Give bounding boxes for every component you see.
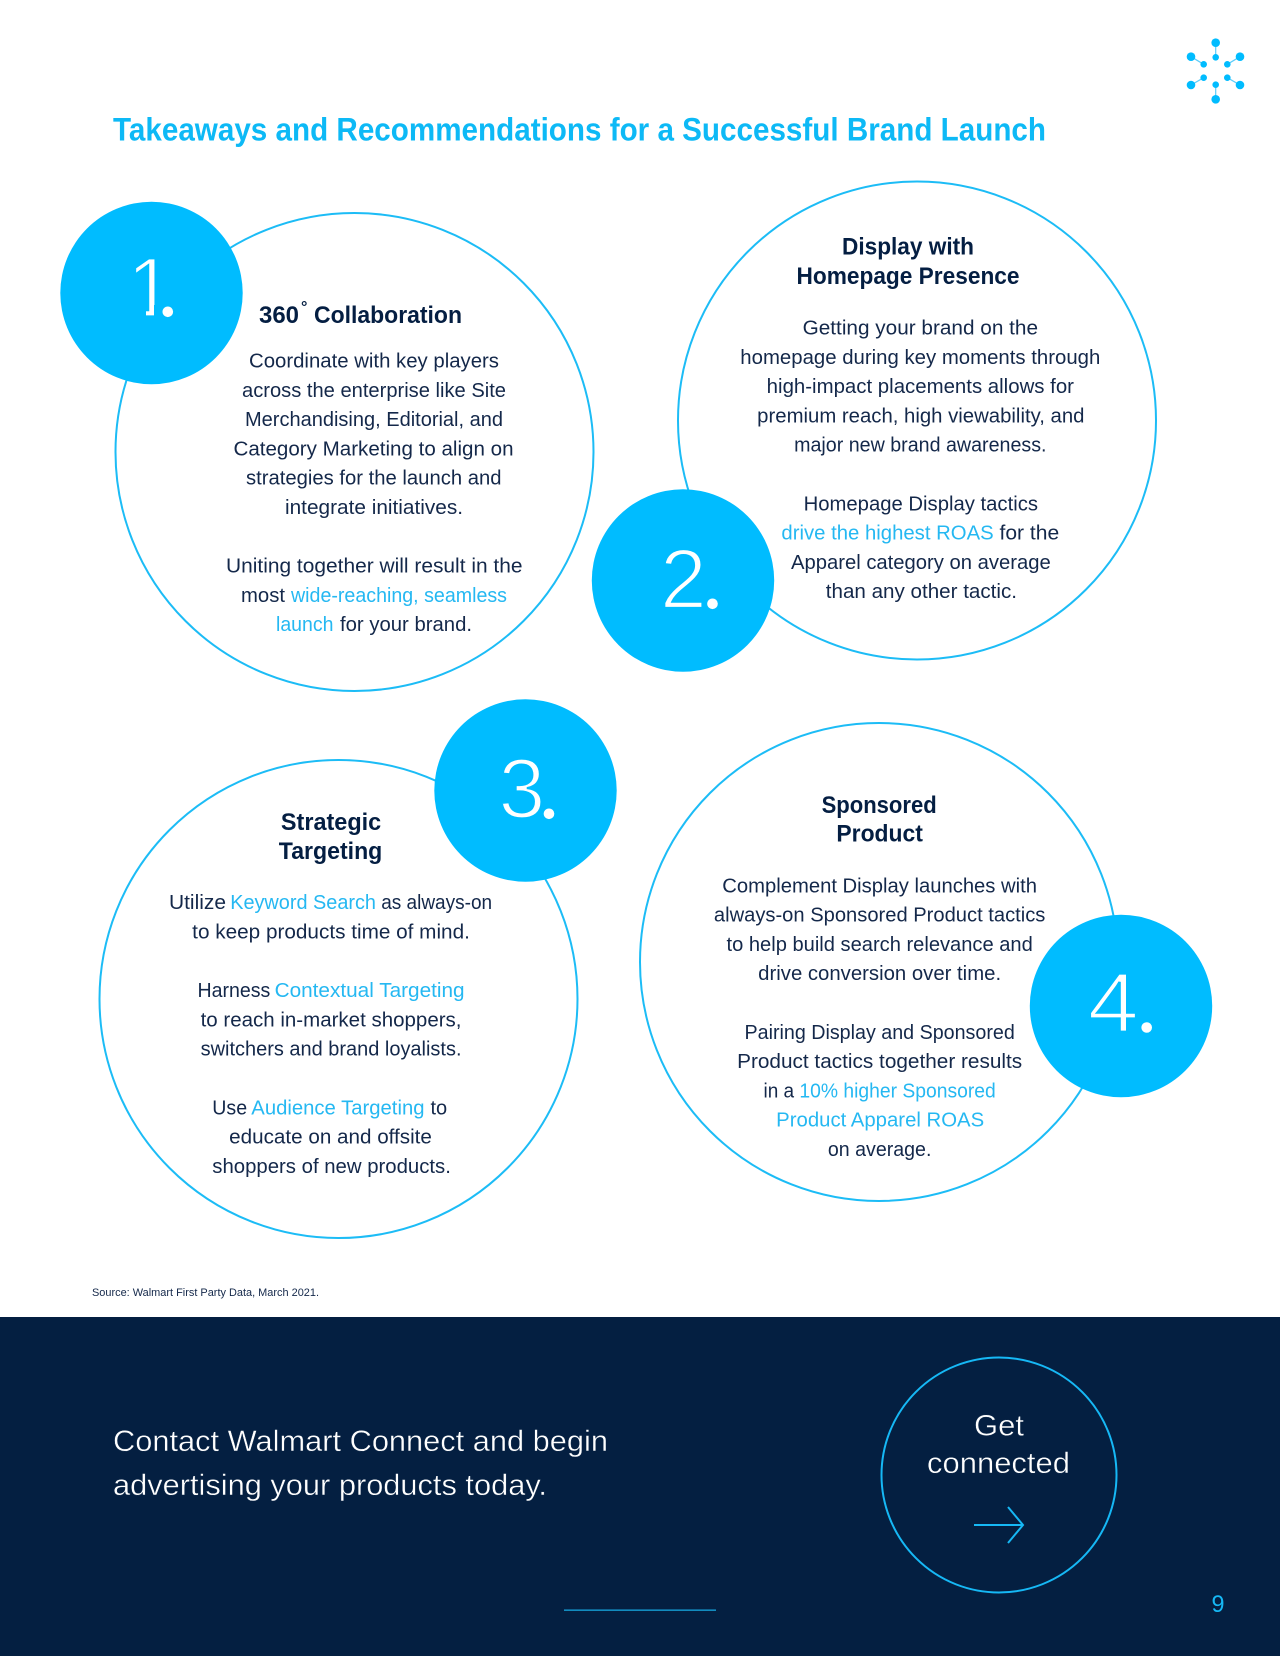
footer message: advertising your products today.: [113, 1469, 547, 1502]
circle outline 4: [640, 723, 1118, 1201]
heading: sponsored product: Product: [836, 821, 923, 848]
body text 1: Merchandising, Editorial, and: [245, 409, 503, 431]
body text 3: Utilize: [169, 892, 226, 914]
heading: 360 collaboration: 360: [259, 302, 299, 329]
body text 3: Keyword Search: [230, 892, 376, 914]
body text 1: Coordinate with key players: [249, 350, 499, 372]
title: Takeaways and Recommendations for a Successful Brand Launch: [113, 112, 1046, 148]
body text 2: drive the highest ROAS: [781, 523, 994, 545]
body text 1: strategies for the launch and: [246, 468, 502, 490]
body text 2: premium reach, high viewability, and: [757, 405, 1084, 427]
panel: 360 collaboration: [60, 202, 594, 691]
body text 4: always-on Sponsored Product tactics: [714, 905, 1045, 927]
page number: 9: [1212, 1591, 1224, 1618]
footer divider: [564, 1610, 716, 1611]
number badge 1: .: [160, 261, 176, 328]
body text 2: major new brand awareness.: [794, 435, 1046, 457]
number badge 3: [434, 699, 617, 882]
body text 1: for your brand.: [340, 614, 472, 636]
number badge 1: [60, 202, 243, 384]
body text 4: Product Apparel ROAS: [776, 1110, 984, 1132]
body text 1: Uniting together will result in the: [226, 556, 522, 578]
body text 2: homepage during key moments through: [740, 347, 1100, 369]
number badge 4: .: [1138, 977, 1155, 1044]
number badge 4: 4: [1088, 956, 1139, 1050]
number badge 2: [592, 489, 774, 672]
icon: arrow: [974, 1507, 1023, 1543]
number badge 2: .: [704, 553, 721, 620]
body text 1: across the enterprise like Site: [242, 380, 506, 402]
body text 1: wide-reaching, seamless: [290, 585, 507, 607]
body text 3: [169, 892, 492, 1178]
footer band: [0, 1317, 1280, 1656]
body text 2: for the: [1000, 523, 1059, 545]
number badge 2: 2: [660, 532, 707, 626]
body text 4: on average.: [828, 1139, 931, 1161]
footer message: Contact Walmart Connect and begin: [113, 1425, 608, 1458]
number badge 3: .: [541, 763, 557, 830]
body text 1: integrate initiatives.: [285, 497, 463, 519]
body text 2: [740, 318, 1100, 603]
body text 2: Homepage Display tactics: [804, 493, 1038, 515]
body text 3: to reach in-market shoppers,: [201, 1009, 462, 1031]
body text 3: educate on and offsite: [229, 1127, 432, 1149]
body text 1: most: [241, 585, 285, 607]
body text 4: 10% higher Sponsored: [799, 1080, 996, 1102]
heading: 360 collaboration: °: [301, 299, 307, 316]
body text 3: Use: [212, 1097, 247, 1119]
body text 3: Harness: [198, 980, 270, 1002]
icon: spark logo: [1187, 38, 1244, 104]
source note: Source: Walmart First Party Data, March 2021.: [92, 1287, 319, 1299]
body text 3: Audience Targeting: [251, 1097, 424, 1119]
number badge 4: [1030, 915, 1212, 1097]
circle outline 2: [678, 182, 1156, 660]
body text 2: high-impact placements allows for: [767, 376, 1074, 398]
heading: 360 collaboration: Collaboration: [314, 302, 462, 329]
heading: display with homepage presence: [796, 234, 1020, 290]
body text 3: as always-on: [381, 892, 492, 914]
circle outline 3: [100, 760, 578, 1238]
body text 4: Pairing Display and Sponsored: [744, 1022, 1015, 1044]
panel: strategic targeting: [100, 699, 617, 1238]
heading: strategic targeting: Targeting: [279, 838, 382, 865]
body text 3: shoppers of new products.: [212, 1156, 451, 1178]
body text 3: to: [430, 1097, 447, 1119]
circle outline 1: [116, 213, 594, 691]
body text 2: than any other tactic.: [826, 581, 1017, 603]
heading: strategic targeting: Strategic: [281, 809, 381, 836]
get connected button: Get: [974, 1410, 1025, 1442]
get connected button: connected: [927, 1447, 1070, 1480]
body text 4: [714, 875, 1045, 1161]
footer message: [113, 1425, 608, 1502]
body text 4: drive conversion over time.: [758, 963, 1001, 985]
body text 1: Category Marketing to align on: [234, 438, 514, 460]
body text 1: launch: [276, 614, 334, 636]
body text 4: to help build search relevance and: [726, 934, 1033, 956]
get connected button: [882, 1358, 1116, 1592]
body text 1: [226, 350, 522, 636]
body text 4: Complement Display launches with: [722, 875, 1037, 897]
heading: display with homepage presence: Display with: [842, 234, 974, 260]
panel: sponsored product: [640, 723, 1212, 1201]
body text 2: Getting your brand on the: [803, 318, 1038, 340]
body text 4: Product tactics together results: [737, 1051, 1022, 1073]
body text 4: in a: [764, 1080, 795, 1102]
heading: sponsored product: [822, 792, 937, 848]
number badge 1: 1: [127, 241, 174, 335]
number badge 3: 3: [498, 742, 545, 836]
body text 3: to keep products time of mind.: [192, 922, 470, 944]
heading: strategic targeting: [279, 809, 382, 865]
body text 2: Apparel category on average: [791, 552, 1051, 574]
body text 3: Contextual Targeting: [275, 980, 465, 1002]
heading: display with homepage presence: Homepage Presence: [796, 263, 1020, 290]
heading: 360 collaboration: [259, 299, 462, 329]
body text 3: switchers and brand loyalists.: [201, 1039, 462, 1061]
heading: sponsored product: Sponsored: [822, 792, 937, 819]
panel: display with homepage presence: [592, 182, 1156, 672]
